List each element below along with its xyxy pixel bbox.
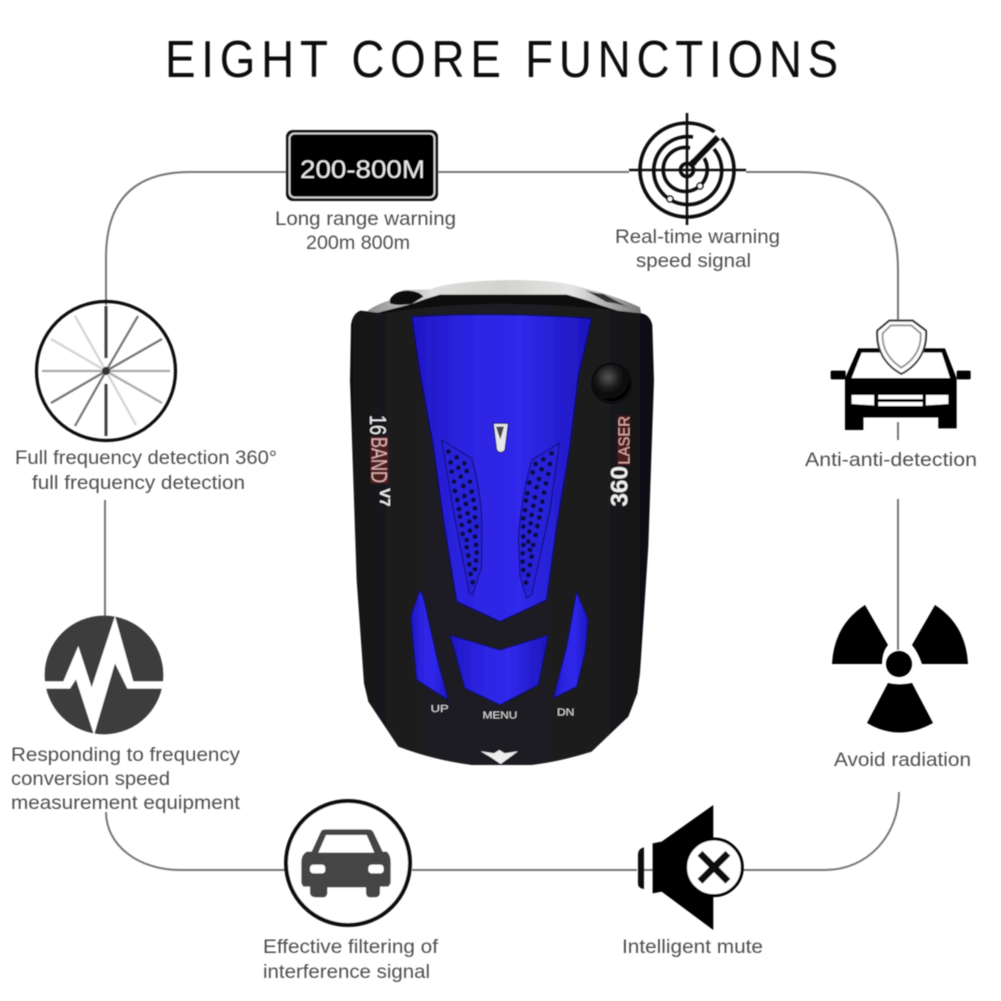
device side label right — [606, 416, 633, 507]
label: responding to frequency: conversion speed — [11, 768, 170, 790]
icon: 360 degree wheel — [36, 302, 176, 440]
device button labels: UP — [431, 704, 449, 715]
label: full frequency detection — [15, 447, 277, 494]
device side label right: 360 — [606, 466, 633, 507]
icon: frequency pulse — [43, 616, 165, 735]
device button labels: MENU — [483, 711, 517, 722]
icon: 200-800M range badge — [286, 130, 438, 201]
icon: car with shield — [831, 321, 971, 430]
label: responding to frequency — [11, 744, 241, 814]
label: effective filtering: Effective filtering of — [263, 936, 439, 958]
label: long range warning: Long range warning — [275, 208, 456, 230]
icon: radiation — [832, 605, 968, 732]
device menu button — [450, 635, 548, 705]
radar detector device — [350, 280, 654, 765]
device main blue panel — [412, 315, 592, 622]
device up button — [411, 590, 448, 700]
device side label left: BAND — [366, 437, 391, 483]
label: long range warning — [275, 208, 456, 254]
device button labels — [431, 704, 574, 722]
device side label right: LASER — [616, 416, 633, 465]
device side label left: V7 — [376, 488, 392, 507]
label: effective filtering: interference signal — [263, 961, 430, 983]
title: EIGHT CORE FUNCTIONS — [165, 31, 838, 89]
label: real-time warning — [615, 226, 780, 272]
icon: radar — [629, 113, 746, 225]
label: anti-anti-detection: Anti-anti-detection — [805, 449, 977, 471]
connector line loop — [105, 172, 899, 870]
device right grille — [518, 443, 559, 598]
label: full frequency detection: Full frequency detection 360° — [15, 447, 277, 469]
label: responding to frequency: measurement equipment — [11, 792, 241, 814]
device top chrome — [363, 280, 643, 327]
icon: car in circle — [286, 801, 410, 925]
device knob — [591, 363, 632, 404]
label: intelligent mute: Intelligent mute — [622, 936, 763, 958]
label: avoid radiation: Avoid radiation — [834, 749, 971, 771]
device chrome V mark — [493, 423, 508, 452]
label: long range warning: 200m 800m — [306, 232, 410, 254]
icon: muted speaker — [638, 805, 742, 930]
device button labels: DN — [557, 708, 574, 719]
icon: 200-800M range badge: 200-800M — [300, 156, 425, 184]
device side label left: 16 — [365, 415, 391, 435]
label: full frequency detection: full frequency detection — [32, 472, 245, 494]
label: real-time warning: speed signal — [636, 250, 751, 272]
device down button — [553, 592, 588, 698]
device body — [350, 304, 654, 765]
label: effective filtering — [263, 936, 439, 983]
label: real-time warning: Real-time warning — [615, 226, 780, 248]
device logo — [481, 750, 518, 764]
device side label left — [365, 415, 392, 507]
device left grille — [442, 440, 482, 595]
label: responding to frequency: Responding to frequency — [11, 744, 240, 766]
